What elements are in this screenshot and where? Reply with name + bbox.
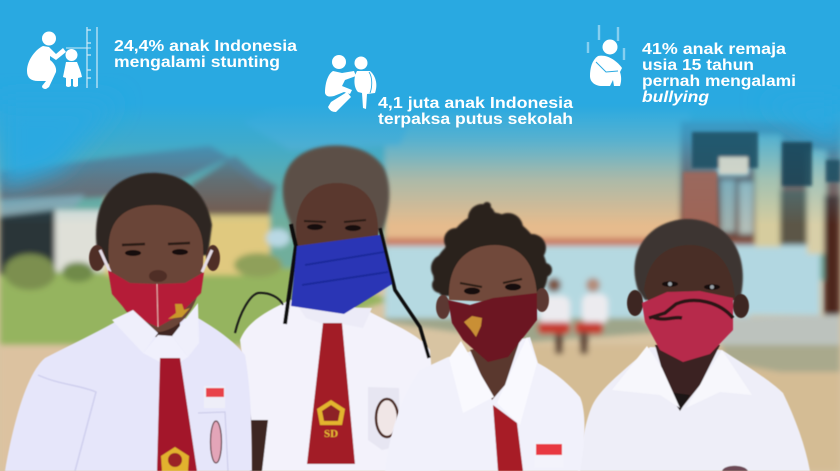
shirt <box>385 337 584 471</box>
mask emblem <box>464 316 482 337</box>
brows and eyes <box>304 220 366 222</box>
left house walls <box>0 205 55 275</box>
neck <box>655 345 720 410</box>
collar <box>612 346 680 408</box>
ears <box>436 295 450 319</box>
brows and eyes <box>122 243 190 245</box>
mask <box>642 291 733 362</box>
shirt badge <box>722 466 748 471</box>
sky and hill <box>0 90 840 280</box>
icon: adult and child with backpack <box>325 55 376 112</box>
main building wall <box>385 110 690 245</box>
pocket line <box>198 412 228 471</box>
text: bullying <box>642 89 709 106</box>
text: 41% anak remaja <box>642 41 786 58</box>
icon: height ruler <box>66 27 97 88</box>
ears <box>627 290 643 316</box>
brows and eyes <box>460 279 522 287</box>
tie <box>307 323 355 464</box>
curly hair <box>431 202 552 296</box>
child 4: patterned red mask <box>578 219 810 471</box>
tie <box>157 358 197 471</box>
right building <box>680 120 840 250</box>
shirt <box>5 318 252 471</box>
neck <box>135 305 180 337</box>
text: terpaksa putus sekolah <box>378 111 573 128</box>
left house roof <box>0 145 280 205</box>
text: usia 15 tahun <box>642 57 754 74</box>
icon: crouching teen with falling marks <box>588 25 624 86</box>
face <box>296 183 378 265</box>
flag on pocket <box>204 386 225 408</box>
shrubs <box>4 254 56 290</box>
hair <box>634 219 743 300</box>
red mask <box>108 270 204 327</box>
stat 3: bullying <box>588 25 796 106</box>
face <box>108 205 203 332</box>
seated children <box>540 296 570 328</box>
grass <box>0 268 390 348</box>
child 3: maroon mask <box>385 202 584 471</box>
child 1: red mask <box>5 173 252 471</box>
text: 24,4% anak Indonesia <box>114 38 297 55</box>
face <box>644 245 735 305</box>
arm <box>250 415 272 471</box>
text <box>642 41 796 106</box>
text <box>114 38 297 71</box>
eyes <box>662 281 678 287</box>
nose <box>149 270 167 282</box>
collar <box>112 310 158 353</box>
shirt <box>240 300 440 471</box>
tie <box>493 405 523 471</box>
flag on pocket <box>534 442 564 468</box>
blue gradient overlay <box>0 0 840 225</box>
ears <box>89 245 105 271</box>
neck <box>470 340 520 400</box>
child 2: blue mask <box>235 146 440 471</box>
blue mask <box>291 235 392 314</box>
main building roof <box>243 90 420 150</box>
pocket badge <box>210 421 222 463</box>
shirt placket <box>143 335 188 362</box>
straps <box>285 224 296 324</box>
shirt <box>578 347 810 471</box>
stat 2: dropout <box>325 55 573 128</box>
ear straps <box>100 250 212 272</box>
building ledge <box>385 318 660 342</box>
ground <box>0 345 130 471</box>
pocket and badge <box>368 387 400 450</box>
maroon mask <box>448 293 537 362</box>
emblem <box>317 400 345 425</box>
tie emblem <box>161 447 189 471</box>
text: 4,1 juta anak Indonesia <box>378 95 573 112</box>
mask pattern <box>649 300 733 319</box>
face <box>449 245 537 302</box>
text: pernah mengalami <box>642 73 796 90</box>
mask emblem <box>168 304 190 319</box>
dark window tops on right building <box>683 132 840 242</box>
collar <box>298 306 372 328</box>
text <box>378 95 573 128</box>
hair <box>96 173 212 265</box>
hair <box>283 146 389 238</box>
icon: adult measuring child <box>27 32 82 89</box>
SD label: SD <box>324 428 338 440</box>
collar <box>449 341 494 413</box>
text: mengalami stunting <box>114 54 280 71</box>
stat 1: stunting <box>27 27 297 89</box>
